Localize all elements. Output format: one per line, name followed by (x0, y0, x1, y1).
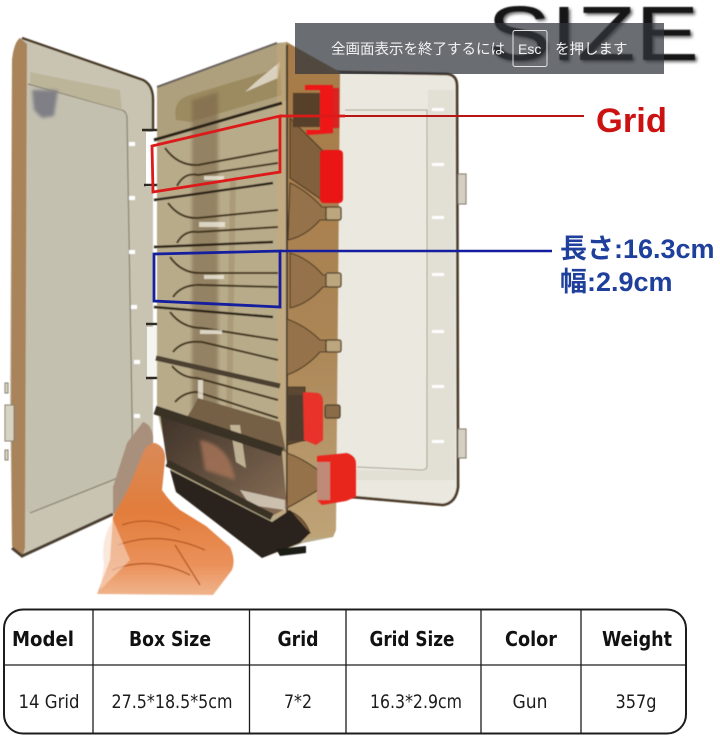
lid ticks (432, 108, 444, 443)
body base (157, 42, 336, 558)
lid inner panel (26, 84, 133, 513)
compartment necks (165, 148, 278, 418)
table header: Grid (278, 627, 318, 651)
central darker band (192, 92, 218, 440)
lower dark compartments (160, 398, 286, 452)
table header: Box Size (129, 627, 211, 651)
table header: Grid Size (370, 627, 454, 651)
icon: hand holding box (97, 422, 234, 595)
callout label: grid dimensions: 幅:2.9cm (560, 267, 673, 297)
callout line: Grid (345, 115, 584, 117)
table header (12, 627, 672, 651)
compartment tabs (325, 207, 341, 418)
fullscreen notice overlay: 全画面表示を終了するには (331, 41, 505, 58)
lid margin strip (356, 90, 455, 480)
specification table (4, 610, 686, 734)
red grid highlight (152, 116, 345, 192)
panel: right open lid (335, 72, 466, 505)
table values: Gun (512, 691, 548, 713)
table values: 357g (616, 691, 656, 713)
table header: Model (12, 627, 74, 651)
table values (18, 691, 656, 713)
lid frame strip (11, 38, 27, 558)
blue grid highlight (154, 251, 280, 307)
table header: Color (505, 627, 557, 651)
bottle shapes on right strip (287, 118, 328, 542)
fullscreen notice overlay (295, 23, 664, 74)
table values: 16.3*2.9cm (370, 691, 462, 713)
table values: 27.5*18.5*5cm (112, 691, 232, 713)
table values: 7*2 (284, 691, 312, 713)
divider bars (154, 103, 282, 386)
table header: Weight (602, 627, 672, 651)
lid latches (458, 174, 466, 458)
right brown strip (286, 42, 340, 540)
callout label: grid dimensions: 長さ:16.3cm (560, 234, 715, 264)
panel: left open lid (5, 38, 153, 558)
fullscreen notice overlay: Esc (518, 41, 541, 57)
side clips (5, 383, 14, 460)
fullscreen notice overlay: を押します (555, 41, 628, 58)
hinge strip (142, 130, 164, 378)
table values: 14 Grid (18, 691, 80, 713)
neck highlights (198, 176, 225, 404)
red latches (288, 85, 356, 505)
callout label: Grid: Grid (596, 102, 667, 140)
callout line: grid dimensions (280, 250, 552, 252)
panel: tackle box body with compartments (154, 42, 341, 558)
small clip at bottom (276, 546, 306, 556)
